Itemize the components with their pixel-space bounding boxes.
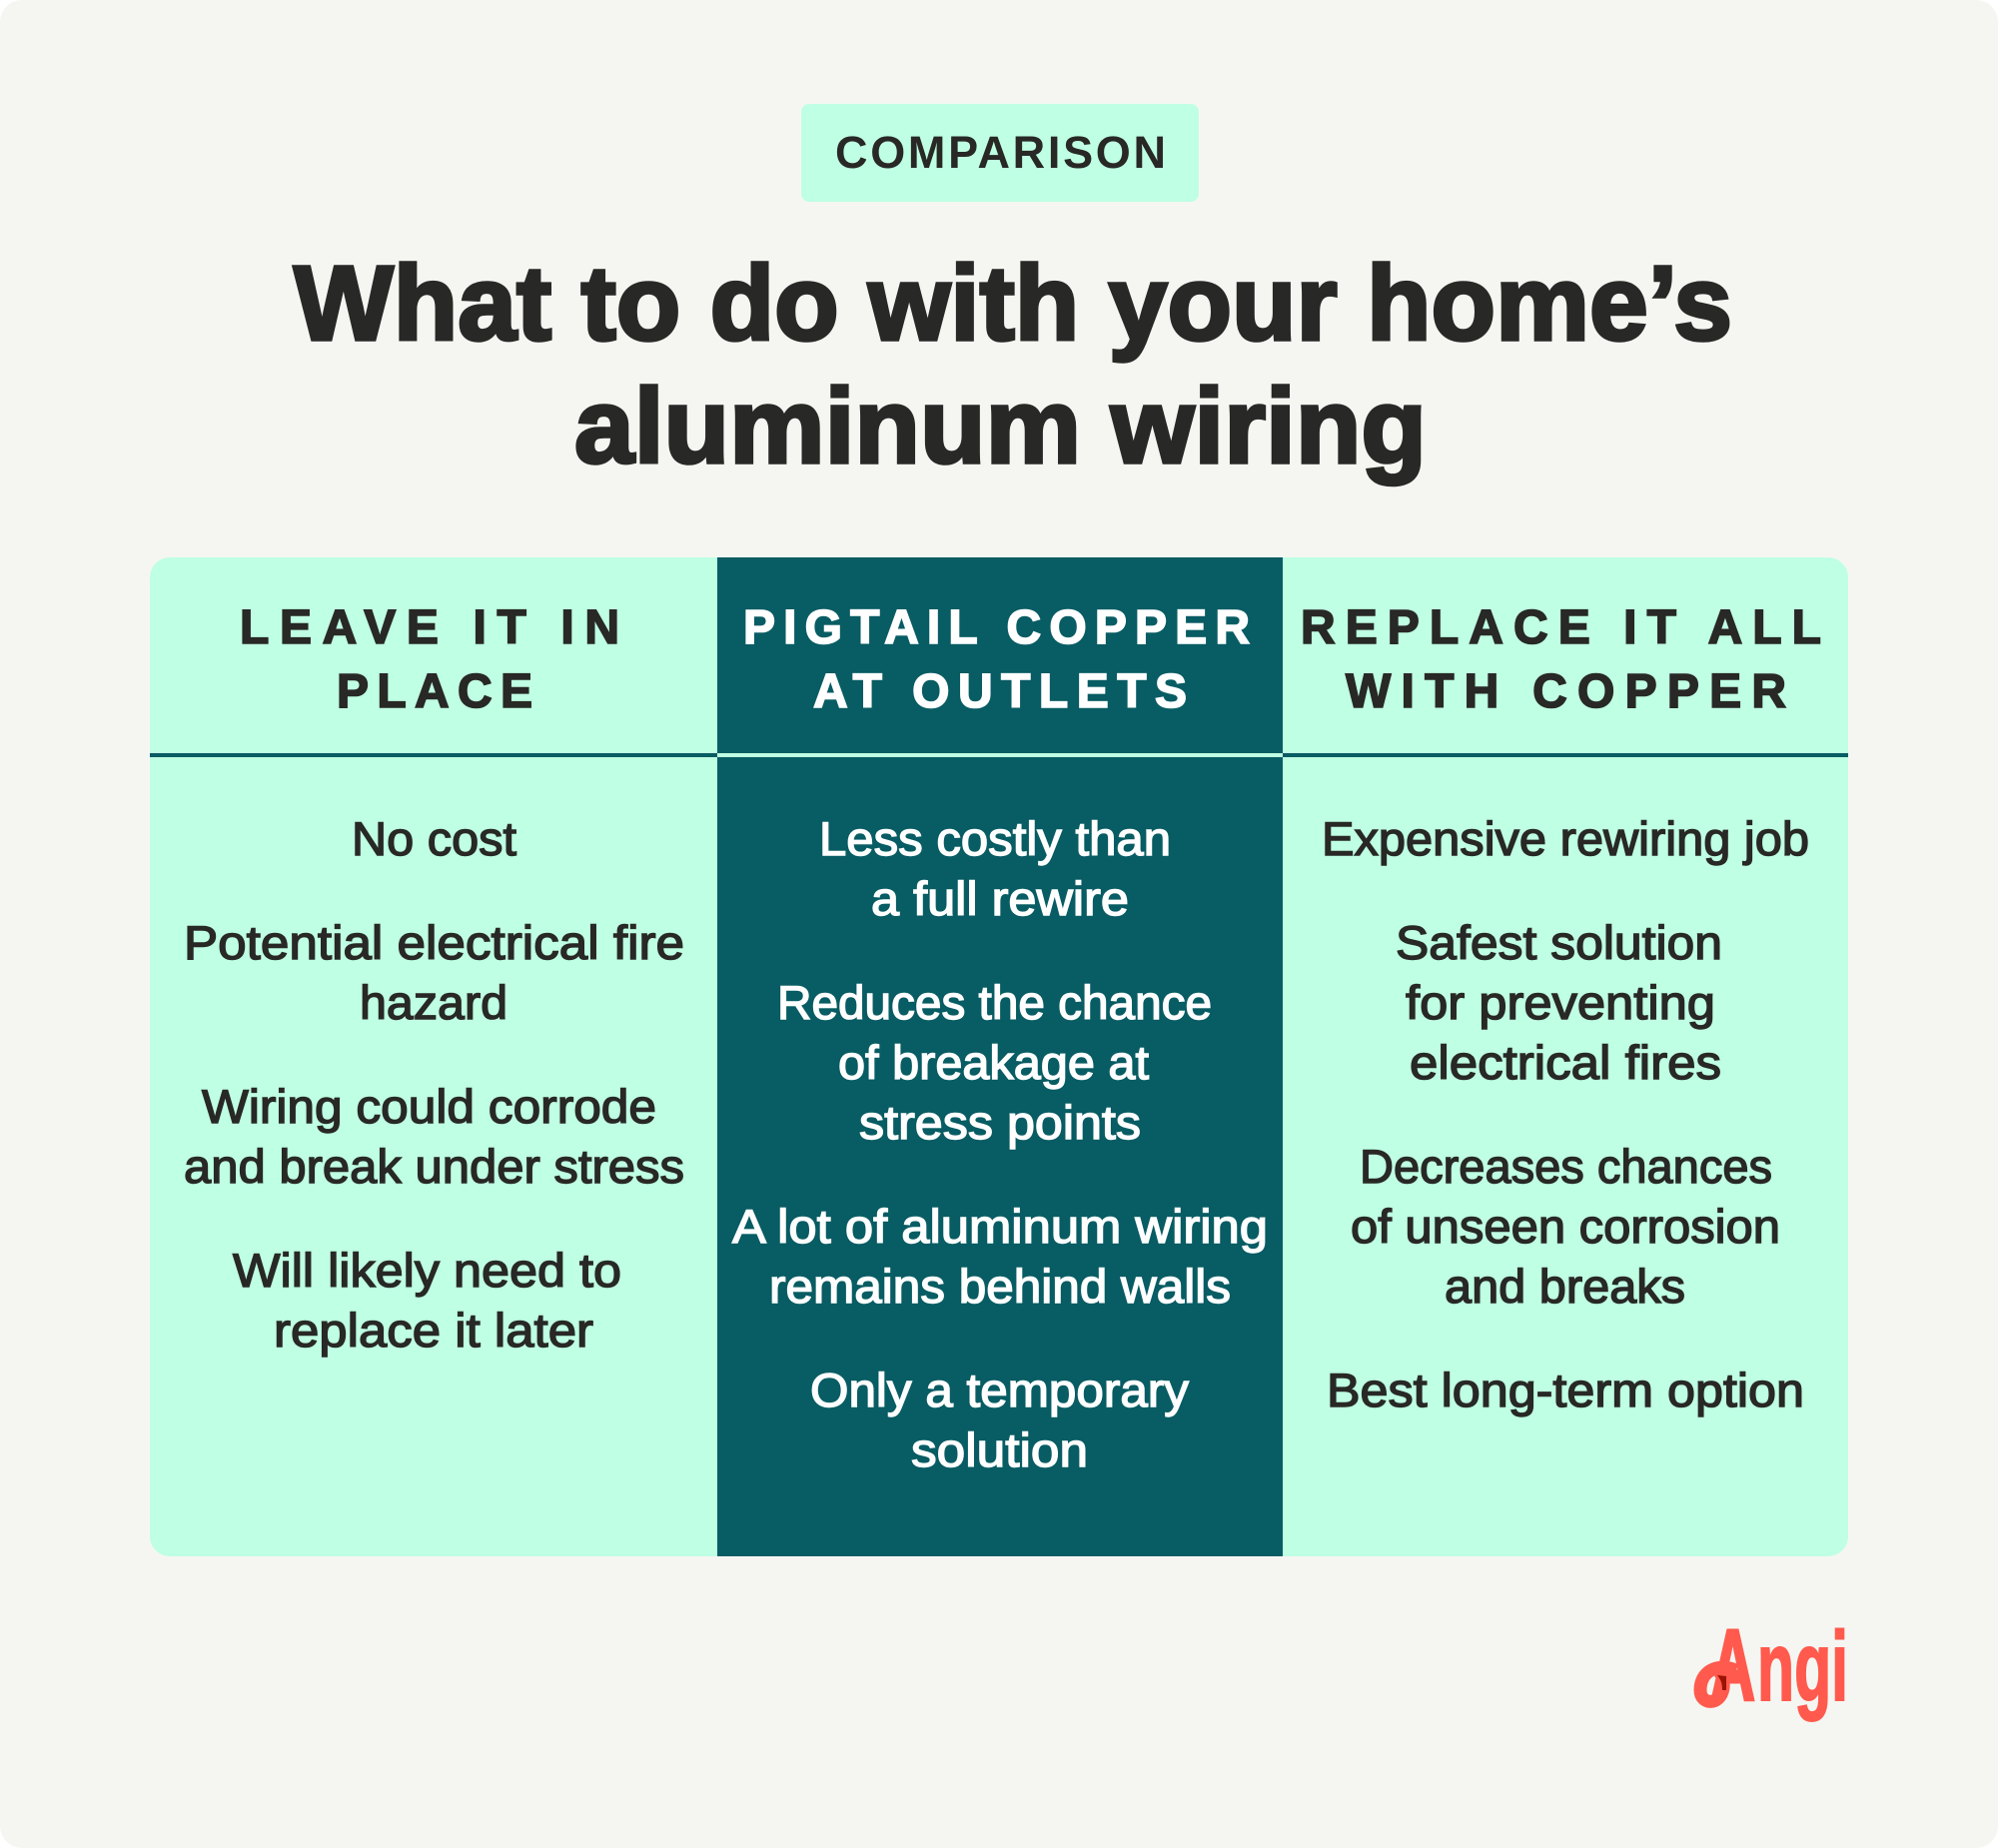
list: pigtail copper points: of breakage at [838,1036,1149,1089]
comparison table [150,557,1848,1556]
panel: replace it all with copper [1283,557,1848,1556]
title: aluminum wiring [574,368,1427,485]
list: replace it all points: and breaks [1445,1260,1685,1313]
title [294,245,1732,485]
list: leave it in place points: hazard [360,976,507,1029]
title: What to do with your home’s [294,245,1732,363]
list: pigtail copper points: Only a temporary [810,1364,1190,1416]
heading: leave it in place: LEAVE IT IN [240,601,619,654]
list: pigtail copper points: Less costly than [819,812,1171,865]
list: replace it all points: of unseen corrosion [1351,1200,1780,1253]
heading: leave it in place: PLACE [337,665,532,718]
tag: comparison: COMPARISON [835,127,1166,178]
list: pigtail copper points: Reduces the chance [777,976,1212,1029]
list: leave it in place points [184,812,684,1357]
list: pigtail copper points: remains behind walls [769,1260,1231,1313]
logo: Angi: A [1710,1610,1755,1722]
logo: Angi: ngi [1757,1611,1848,1721]
list: leave it in place points: and break under stress [184,1140,684,1193]
list: replace it all points: electrical fires [1410,1036,1721,1089]
list: leave it in place points: Wiring could corrode [202,1080,656,1133]
list: leave it in place points: Potential electrical fire [184,916,684,969]
list: replace it all points [1322,812,1809,1416]
list: replace it all points: Decreases chances [1360,1140,1772,1193]
list: pigtail copper points [732,812,1268,1476]
heading: pigtail copper at outlets: AT OUTLETS [813,665,1187,718]
logo: Angi [1700,1610,1848,1722]
heading: pigtail copper at outlets: PIGTAIL COPPER [743,601,1250,654]
list: pigtail copper points: stress points [859,1096,1141,1149]
list: replace it all points: Expensive rewiring job [1322,812,1809,865]
list: replace it all points: Best long-term option [1327,1364,1804,1416]
list: leave it in place points: No cost [352,812,516,865]
panel: leave it in place [150,557,717,1556]
heading: replace it all with copper: WITH COPPER [1346,665,1786,718]
heading: pigtail copper at outlets [743,601,1250,718]
heading: replace it all with copper [1301,601,1821,718]
list: replace it all points: for preventing [1406,976,1715,1029]
list: replace it all points: Safest solution [1396,916,1722,969]
heading: replace it all with copper: REPLACE IT ALL [1301,601,1821,654]
heading: leave it in place [240,601,619,718]
list: pigtail copper points: a full rewire [871,872,1129,925]
list: pigtail copper points: A lot of aluminum wiring [732,1200,1268,1253]
panel: pigtail copper at outlets [717,557,1283,1556]
list: leave it in place points: Will likely need to [233,1244,621,1297]
list: leave it in place points: replace it later [274,1304,593,1357]
list: pigtail copper points: solution [911,1423,1088,1476]
tag: comparison [801,104,1199,202]
